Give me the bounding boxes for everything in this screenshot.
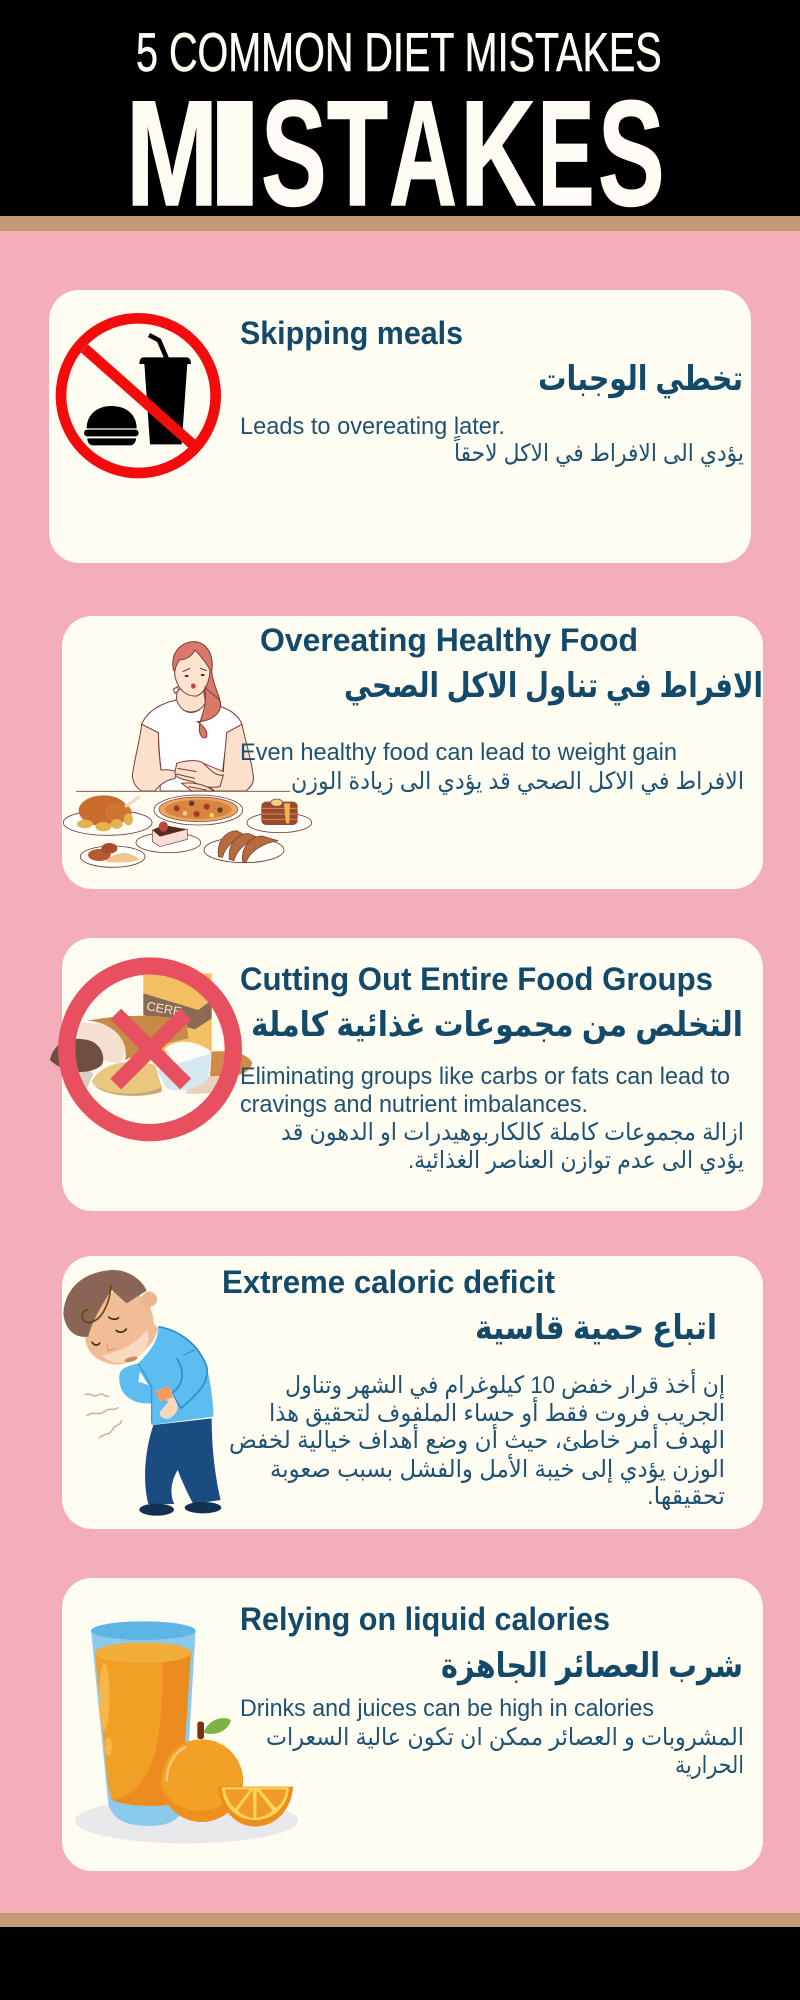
description: Drinks and juices can be high in calories — [240, 1695, 654, 1722]
arabic paragraph: الوزن يؤدي إلى خيبة الأمل والفشل بسبب صعوبة — [270, 1454, 725, 1484]
sub: pizza — [159, 797, 238, 822]
panel: overeating healthy food — [62, 616, 763, 889]
title line: mistakes — [126, 69, 665, 238]
arabic paragraph: الهدف أمر خاطئ، حيث أن وضع أهداف خيالية لخفض — [229, 1424, 725, 1454]
description: cravings and nutrient imbalances. — [240, 1091, 588, 1118]
title line: mistakes: A — [389, 70, 457, 237]
arabic description: المشروبات و العصائر ممكن ان تكون عالية السعرات — [266, 1724, 744, 1751]
description: Leads to overeating later. — [240, 413, 505, 440]
title line: mistakes: T — [327, 71, 388, 238]
arabic paragraph: تحقيقها. — [647, 1483, 725, 1510]
description: Even healthy food can lead to weight gain — [240, 739, 677, 766]
arabic paragraph: إن أخذ قرار خفض 10 كيلوغرام في الشهر وتناول — [285, 1369, 725, 1400]
title line: 5 common diet mistakes: 5 COMMON DIET MISTAKES — [136, 23, 662, 84]
title line: mistakes: S — [261, 69, 327, 237]
panel: cutting out food groups — [50, 938, 763, 1211]
icon: no food or drink sign — [61, 318, 216, 473]
title line: mistakes: S — [598, 70, 665, 237]
arabic heading: شرب العصائر الجاهزة — [441, 1647, 743, 1686]
sub: croissants — [218, 831, 278, 863]
sub: pancakes — [261, 799, 298, 825]
title line: mistakes: K — [460, 70, 536, 237]
sub: cake slice — [152, 821, 187, 847]
arabic paragraph: الجريب فروت فقط أو حساء الملفوف لتحقيق هذا — [269, 1397, 725, 1427]
arabic heading: التخلص من مجموعات غذائية كاملة — [251, 1006, 743, 1045]
description: Eliminating groups like carbs or fats can lead to — [240, 1063, 730, 1090]
icon: glass of orange juice with orange — [75, 1621, 298, 1843]
arabic description — [281, 1119, 744, 1174]
heading: relying on liquid calories: Relying on liquid calories — [240, 1601, 610, 1637]
heading: extreme caloric deficit: Extreme caloric deficit — [222, 1264, 555, 1300]
icon: crossed out carbs and fats: CERE — [145, 999, 183, 1019]
footer band — [0, 1913, 800, 2000]
sub: roast chicken — [77, 795, 140, 831]
title line: mistakes: E — [538, 70, 594, 237]
icon: worried woman with table of food — [63, 642, 312, 867]
title line: mistakes: M — [126, 69, 218, 237]
icon: crossed out carbs and fats — [50, 966, 252, 1133]
arabic heading: تخطي الوجبات — [538, 360, 743, 399]
arabic heading: اتباع حمية قاسية — [475, 1309, 717, 1347]
title line: mistakes: I — [203, 70, 267, 237]
icon: man holding stomach — [63, 1270, 221, 1516]
arabic paragraph — [229, 1369, 725, 1510]
arabic description: يؤدي الى الافراط في الاكل لاحقاً — [453, 436, 744, 467]
panel: extreme caloric deficit — [62, 1256, 763, 1529]
panel: skipping meals — [49, 290, 751, 563]
header band — [0, 0, 800, 238]
arabic description: الحرارية — [675, 1752, 744, 1779]
heading: cutting out entire food groups: Cutting Out Entire Food Groups — [240, 961, 713, 997]
panel: relying on liquid calories — [62, 1578, 763, 1871]
arabic description: ازالة مجموعات كاملة كالكاربوهيدرات او الدهون قد — [281, 1119, 744, 1146]
arabic description — [266, 1724, 744, 1779]
heading: skipping meals: Skipping meals — [240, 315, 463, 351]
heading: overeating healthy food: Overeating Healthy Food — [260, 622, 638, 658]
sub: baked plate — [88, 843, 139, 863]
arabic description: الافراط في الاكل الصحي قد يؤدي الى زيادة الوزن — [291, 768, 744, 795]
arabic description: يؤدي الى عدم توازن العناصر الغذائية. — [408, 1147, 744, 1174]
description — [240, 1063, 730, 1118]
